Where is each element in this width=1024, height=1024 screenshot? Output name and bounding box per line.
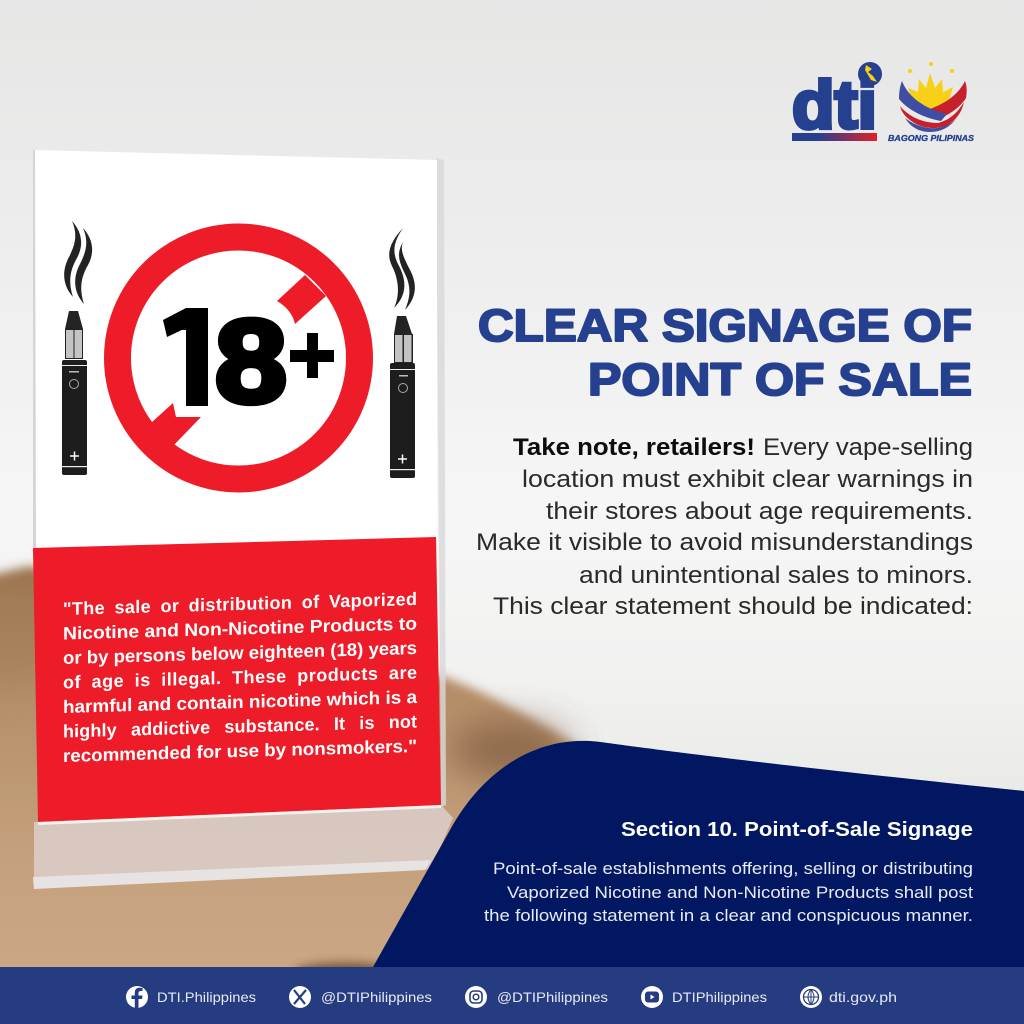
website address: dti.gov.ph xyxy=(829,989,897,1005)
slash stub upper right xyxy=(277,275,326,324)
icon: left vape pen xyxy=(62,221,92,475)
Facebook handle: DTI.Philippines xyxy=(157,989,256,1005)
sign white panel xyxy=(33,150,437,548)
acrylic base xyxy=(34,805,453,880)
icon: Instagram xyxy=(465,986,487,1008)
number 1: 1 xyxy=(161,296,211,428)
sign warning statement: or by persons below eighteen (18) years xyxy=(63,638,417,668)
section text: the following statement in a clear and conspicuous manner. xyxy=(484,907,973,925)
prohibition sign 18+ xyxy=(118,237,360,479)
DTI logo: dti xyxy=(792,67,877,143)
red band lower xyxy=(900,102,964,128)
Instagram handle: @DTIPhilippines xyxy=(497,989,608,1005)
body text xyxy=(476,434,973,620)
number 8: 8 xyxy=(215,296,287,428)
body text: Make it visible to avoid misunderstandings xyxy=(476,529,973,556)
section text: Vaporized Nicotine and Non-Nicotine Products shall post xyxy=(507,884,973,902)
plus sign xyxy=(290,333,334,378)
body text: location must exhibit clear warnings in xyxy=(522,466,973,493)
title xyxy=(478,300,972,405)
logo caption: BAGONG PILIPINAS xyxy=(888,133,974,143)
X handle: @DTIPhilippines xyxy=(321,989,432,1005)
body text: This clear statement should be indicated: xyxy=(493,593,973,620)
title: CLEAR SIGNAGE OF xyxy=(478,300,972,351)
logo underline bar xyxy=(792,133,877,141)
sign warning statement: Nicotine and Non-Nicotine Products to xyxy=(63,613,417,643)
icon: X xyxy=(289,986,311,1008)
sign warning statement: of age is illegal. These products are xyxy=(63,662,417,692)
cover for numeral foot xyxy=(156,300,212,412)
body text: their stores about age requirements. xyxy=(546,498,973,525)
icon: right vape pen xyxy=(389,228,415,478)
sign warning statement: harmful and contain nicotine which is a xyxy=(63,687,418,717)
body text: and unintentional sales to minors. xyxy=(579,562,973,589)
slash arrow lower left xyxy=(152,403,201,445)
title: POINT OF SALE xyxy=(588,354,972,405)
globe badge xyxy=(858,62,882,86)
sun rays xyxy=(908,73,953,112)
Bagong Pilipinas logo xyxy=(888,62,974,143)
section text: Point-of-sale establishments offering, selling or distributing xyxy=(493,860,973,878)
section heading: Section 10. Point-of-Sale Signage xyxy=(621,819,973,841)
body text: Every vape-selling xyxy=(763,434,973,461)
sign warning statement: "The sale or distribution of Vaporized xyxy=(63,589,417,619)
wooden table xyxy=(0,566,600,981)
sign warning statement: recommended for use by nonsmokers." xyxy=(63,736,417,766)
YouTube handle: DTIPhilippines xyxy=(672,989,767,1005)
stars xyxy=(929,62,933,66)
icon: website xyxy=(800,986,822,1008)
sign warning statement: highly addictive substance. It is not xyxy=(63,711,417,741)
sign red panel xyxy=(33,537,441,822)
blue band left xyxy=(899,81,947,121)
body text: Take note, retailers! xyxy=(513,434,755,461)
icon: YouTube xyxy=(641,986,663,1008)
acrylic sign holder xyxy=(33,150,453,889)
navy panel: Section 10 xyxy=(373,741,1024,967)
icon: Facebook xyxy=(126,986,148,1008)
red band right xyxy=(927,81,967,118)
numeral stem xyxy=(163,308,208,406)
sign warning statement xyxy=(63,589,418,766)
smoke xyxy=(64,221,81,297)
smoke xyxy=(389,228,404,308)
red ring xyxy=(118,237,360,479)
section text xyxy=(484,860,973,925)
blue band bottom xyxy=(905,118,956,132)
footer bar xyxy=(0,967,1024,1024)
acrylic edge xyxy=(436,158,446,807)
